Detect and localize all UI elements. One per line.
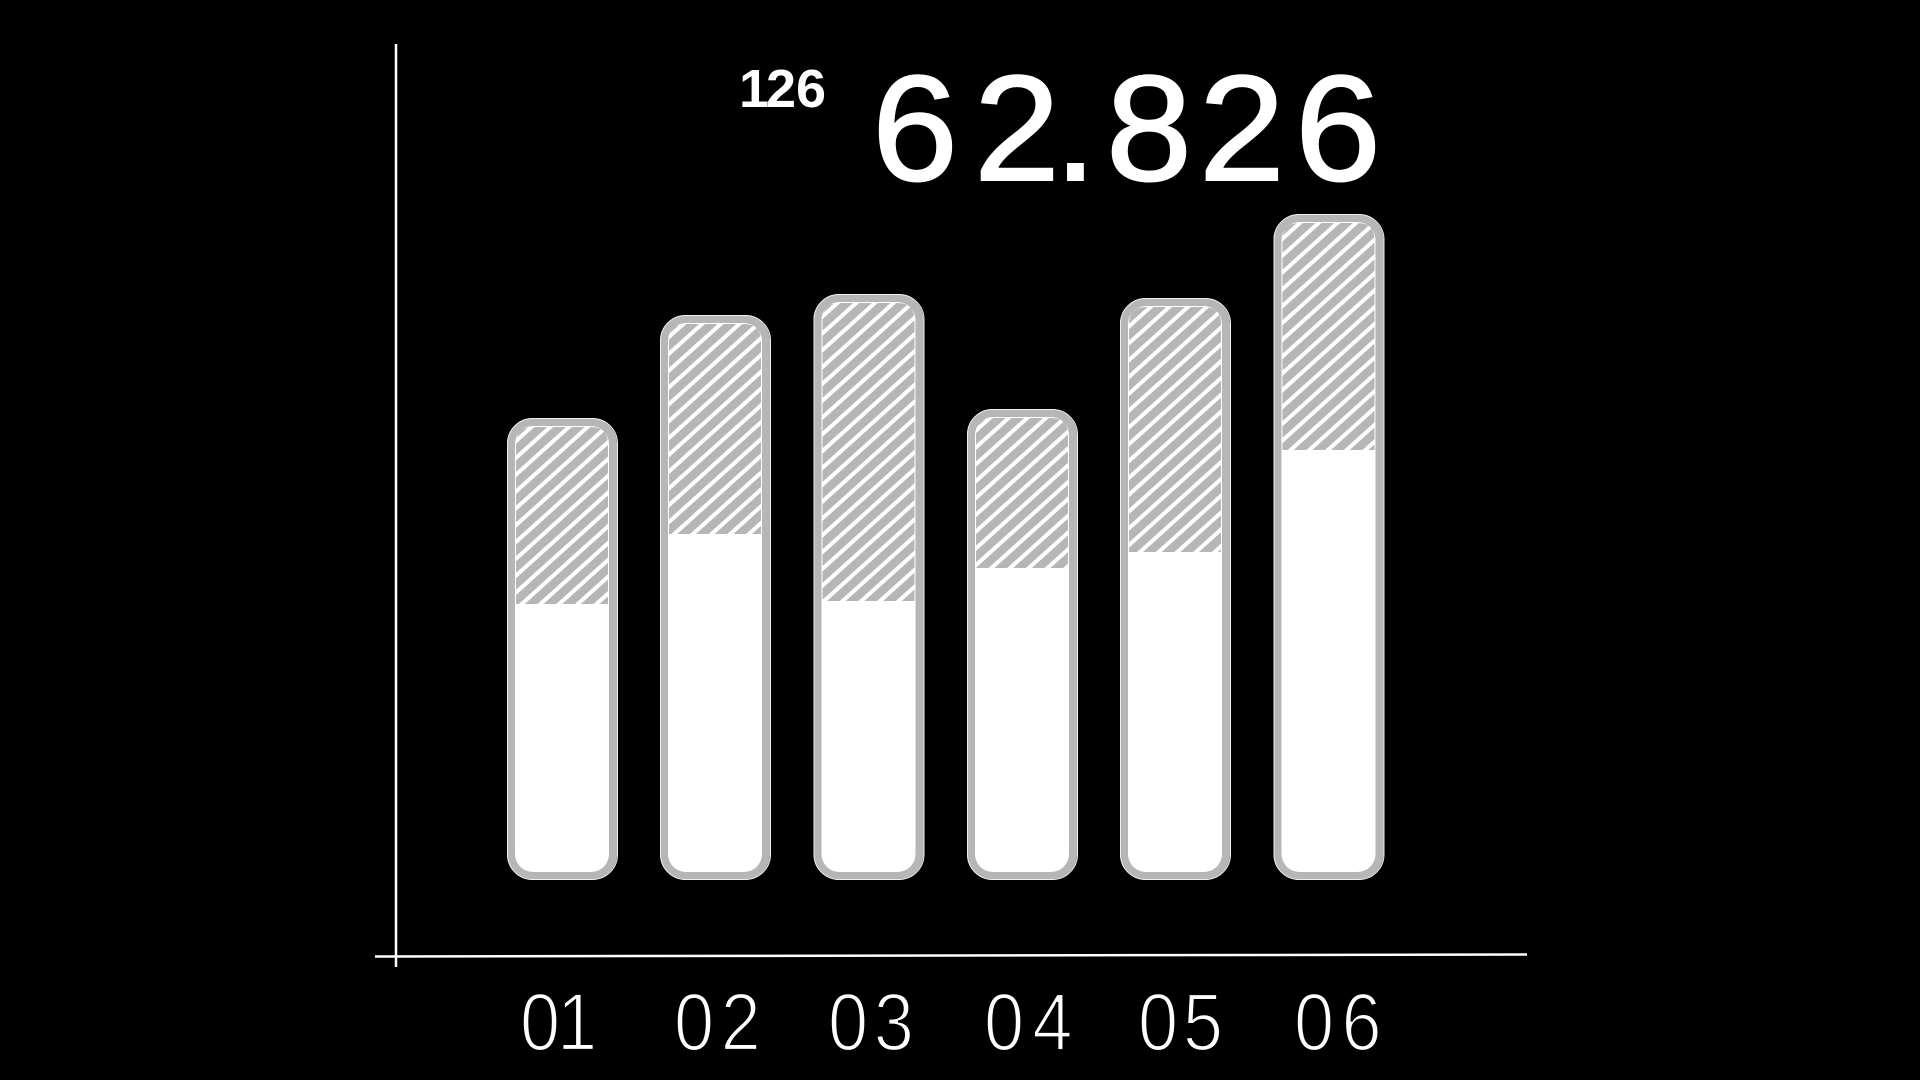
- x axis label 03: 03: [828, 977, 914, 1068]
- bar 03: [814, 294, 924, 880]
- x axis label 06: 06: [1294, 977, 1382, 1068]
- x axis: [375, 954, 1527, 956]
- x axis label 02: 02: [674, 977, 761, 1068]
- bar 05: [1120, 298, 1230, 880]
- x axis label 05: 05: [1138, 977, 1223, 1068]
- bar 04: [968, 410, 1078, 880]
- bar 06: [1274, 214, 1384, 880]
- y axis: [395, 44, 397, 967]
- bar 02: [660, 316, 770, 880]
- x axis label 04: 04: [984, 977, 1073, 1068]
- small value 126: 126: [739, 59, 826, 119]
- x axis label 01: 01: [520, 977, 597, 1068]
- main value 62.826: 62.826: [872, 45, 1381, 213]
- bar 01: [508, 418, 618, 880]
